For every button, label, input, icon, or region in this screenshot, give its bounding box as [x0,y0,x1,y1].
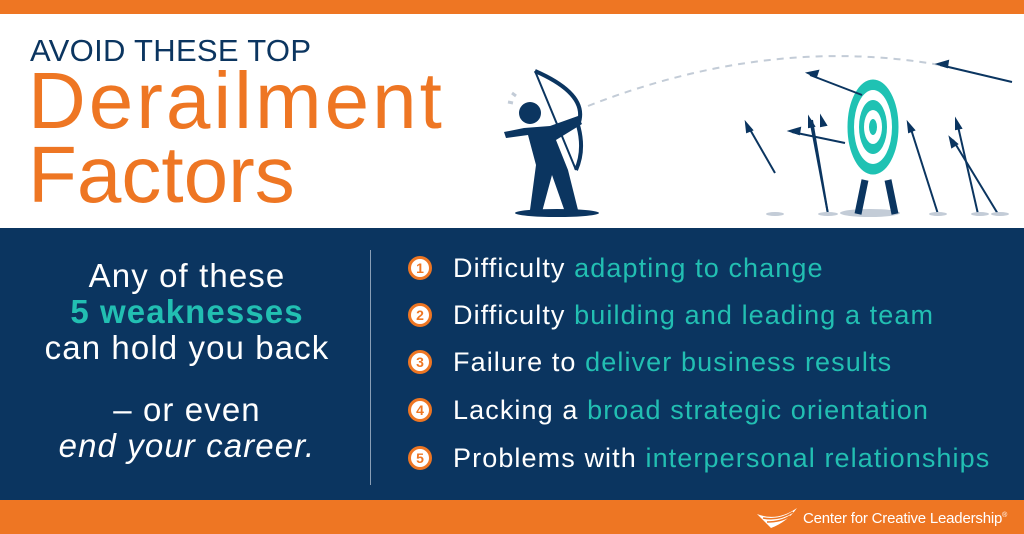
left text block: end your career. [59,427,315,464]
item 5: Problems with [453,442,637,472]
item 2 [408,300,934,330]
list: weaknesses [408,252,990,472]
subtitle: avoid these top: AVOID THESE TOP [30,33,311,68]
title [28,33,445,219]
item 4: Lacking a [453,394,578,424]
item 3: 3 [416,354,424,370]
item 4 [408,394,929,424]
icon: wing [757,508,797,528]
item 3 [408,346,892,376]
item 5 [408,442,990,472]
illustration: archer and target [504,55,1012,217]
left text block: Any of these [89,257,285,294]
item 2: Difficulty [453,300,566,330]
item 5: interpersonal relationships [645,442,990,472]
heading: derailment factors: Derailment [28,56,445,145]
logo: Center for Creative Leadership® [803,510,1007,526]
left text block [45,257,329,464]
navy panel [0,228,1024,500]
item 1 [408,252,824,282]
heading: derailment factors [28,56,445,219]
divider [370,250,371,485]
top orange bar [0,0,1024,14]
target [840,80,900,217]
left text block: can hold you back – or even [45,329,329,428]
item 2: building and leading a team [574,300,934,330]
footer bar [0,500,1024,534]
item 3: deliver business results [585,346,892,376]
arrows [746,61,1012,214]
item 3: Failure to [453,346,577,376]
left text block: 5 weaknesses [70,293,304,330]
item 1: 1 [416,260,424,276]
item 2: 2 [416,307,424,323]
item 4: 4 [416,402,424,418]
item 4: broad strategic orientation [587,394,929,424]
item 1: Difficulty [453,252,566,282]
item 1: adapting to change [574,252,824,282]
heading: derailment factors: Factors [28,130,295,219]
logo [757,508,1008,528]
archer [504,71,599,217]
item 5: 5 [416,450,424,466]
